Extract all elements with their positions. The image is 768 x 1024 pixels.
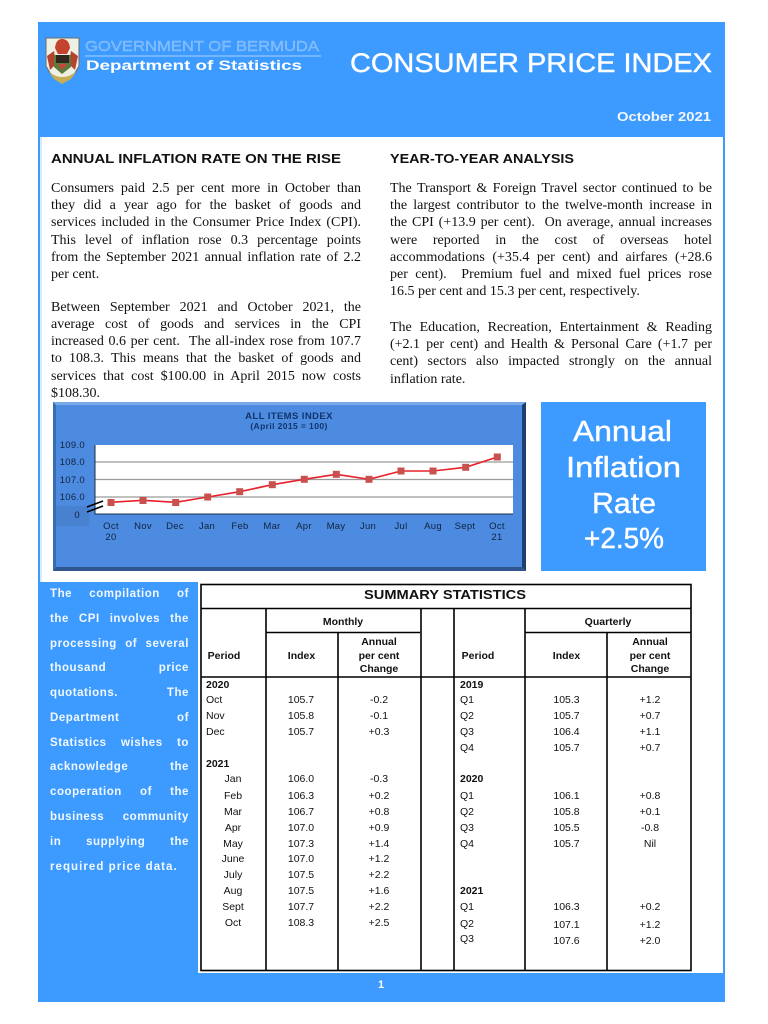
monthly data: +2.5 bbox=[369, 917, 390, 929]
monthly data: +1.2 bbox=[369, 853, 390, 865]
x axis labels: Nov bbox=[134, 521, 152, 532]
quarterly data: +1.2 bbox=[640, 919, 661, 931]
quarterly data: Q1 bbox=[460, 790, 474, 802]
quarterly data: -0.8 bbox=[641, 822, 659, 834]
heading: Government of Bermuda: GOVERNMENT OF BERMUDA bbox=[85, 39, 319, 55]
x axis labels: Jan bbox=[199, 521, 215, 532]
monthly data: Aug bbox=[224, 885, 242, 897]
callout: annual inflation rate: +2.5% bbox=[584, 523, 664, 555]
x axis labels: Dec bbox=[166, 521, 184, 532]
heading: Department of Statistics: Department of Statistics bbox=[86, 57, 302, 73]
quarterly data: 105.7 bbox=[553, 710, 580, 722]
quarterly data: 106.4 bbox=[553, 726, 580, 738]
quarterly data: +0.7 bbox=[640, 742, 661, 754]
text block: year-to-year analysis: cent) sectors also impacted strongly on the annual bbox=[390, 354, 712, 369]
quarterly data: +0.7 bbox=[640, 710, 661, 722]
callout: annual inflation rate: Rate bbox=[592, 488, 656, 520]
text block: inflation commentary: This level of inflation rose 0.3 percentage points bbox=[51, 233, 361, 248]
text block: year-to-year analysis: per cent). Premium fuel and mixed fuel prices rose bbox=[390, 267, 712, 282]
quarterly data: Q3 bbox=[460, 726, 474, 738]
text block: year-to-year analysis: were reported in the cost of overseas hotel bbox=[390, 233, 712, 248]
callout: annual inflation rate bbox=[541, 402, 706, 571]
y axis labels: 0 bbox=[74, 510, 80, 521]
column headers: Period bbox=[208, 650, 240, 662]
text block: year-to-year analysis: The Education, Recreation, Entertainment & Reading bbox=[390, 320, 712, 335]
page number: 1 bbox=[378, 979, 384, 991]
monthly data: +0.2 bbox=[369, 790, 390, 802]
text block: inflation commentary: services that cost $100.00 in April 2015 now costs bbox=[51, 369, 361, 384]
quarterly data: Q2 bbox=[460, 806, 474, 818]
quarterly data: Q4 bbox=[460, 838, 474, 850]
quarterly data: 105.8 bbox=[553, 806, 580, 818]
quarterly data bbox=[460, 679, 661, 947]
monthly data: Feb bbox=[224, 790, 242, 802]
quarterly data: +1.1 bbox=[640, 726, 661, 738]
monthly data: 107.5 bbox=[288, 885, 314, 897]
text block: sidebar acknowledgement: Statistics wishes to bbox=[50, 737, 189, 749]
quarterly data: 105.5 bbox=[553, 822, 580, 834]
column headers: Index bbox=[288, 650, 315, 662]
monthly data: +1.4 bbox=[369, 838, 390, 850]
quarterly data: Q2 bbox=[460, 918, 474, 930]
column headers bbox=[208, 616, 671, 675]
monthly data: May bbox=[223, 838, 244, 850]
x axis labels: Apr bbox=[296, 521, 312, 532]
text block: sidebar acknowledgement: business community bbox=[50, 811, 189, 823]
quarterly data: +0.1 bbox=[640, 806, 661, 818]
y axis labels: 107.0 bbox=[60, 475, 85, 486]
quarterly data: Q1 bbox=[460, 901, 474, 913]
monthly data bbox=[206, 679, 390, 929]
y axis labels: 109.0 bbox=[60, 440, 85, 451]
monthly data: Dec bbox=[206, 726, 225, 738]
white content area bbox=[40, 137, 723, 973]
monthly data: +0.8 bbox=[369, 806, 390, 818]
chart title bbox=[245, 411, 333, 431]
date: October 2021 bbox=[617, 110, 711, 124]
monthly data: +0.9 bbox=[369, 822, 390, 834]
text block: inflation commentary: services included in the Consumer Price Index (CPI). bbox=[51, 215, 361, 230]
text block: sidebar acknowledgement: processing of several bbox=[50, 638, 189, 650]
monthly data: -0.1 bbox=[370, 710, 388, 722]
text block: sidebar acknowledgement: thousand price bbox=[50, 662, 189, 674]
monthly data: Jan bbox=[225, 773, 242, 785]
column headers: Index bbox=[553, 650, 580, 662]
monthly data: 106.7 bbox=[288, 806, 314, 818]
monthly data: 106.3 bbox=[288, 790, 314, 802]
column headers: Quarterly bbox=[585, 616, 632, 628]
chart title: ALL ITEMS INDEX bbox=[245, 411, 333, 422]
x axis labels: 21 bbox=[491, 532, 503, 543]
table title: SUMMARY STATISTICS bbox=[364, 588, 526, 602]
quarterly data: Q2 bbox=[460, 710, 474, 722]
text block: year-to-year analysis: inflation rate. bbox=[390, 372, 465, 387]
monthly data: Nov bbox=[206, 710, 225, 722]
text block: year-to-year analysis: The Transport & Foreign Travel sector continued to be bbox=[390, 181, 712, 196]
monthly data: 105.8 bbox=[288, 710, 314, 722]
monthly data: Apr bbox=[225, 822, 242, 834]
data points bbox=[108, 454, 501, 506]
quarterly data: 105.7 bbox=[553, 838, 580, 850]
y axis labels bbox=[60, 440, 85, 521]
text block: year-to-year analysis: 16.5 per cent and 15.3 per cent, respectively. bbox=[390, 284, 640, 299]
monthly data: -0.3 bbox=[370, 773, 388, 785]
text block: inflation commentary: Between September 2021 and October 2021, the bbox=[51, 300, 361, 315]
quarterly data: Q4 bbox=[460, 742, 474, 754]
text block: sidebar acknowledgement: Department of bbox=[50, 712, 189, 724]
text block: inflation commentary: from the September 2021 annual inflation rate of 2.2 bbox=[51, 250, 361, 265]
monthly data: June bbox=[222, 853, 245, 865]
heading: annual inflation rate: ANNUAL INFLATION RATE ON THE RISE bbox=[51, 151, 341, 166]
monthly data: 107.3 bbox=[288, 838, 314, 850]
quarterly data: Q1 bbox=[460, 694, 474, 706]
column headers: Annual bbox=[361, 636, 397, 648]
column headers: Change bbox=[360, 663, 398, 675]
text block: year-to-year analysis: accommodations (+35.4 per cent) and airfares (+28.6 bbox=[390, 250, 712, 265]
y axis labels: 106.0 bbox=[60, 492, 85, 503]
quarterly data: 106.1 bbox=[553, 790, 580, 802]
quarterly data: 2020 bbox=[460, 773, 484, 785]
quarterly data: 2021 bbox=[460, 885, 484, 897]
monthly data: +2.2 bbox=[369, 869, 390, 881]
monthly data: 105.7 bbox=[288, 726, 314, 738]
quarterly data: 106.3 bbox=[553, 901, 580, 913]
x axis labels: Sept bbox=[455, 521, 475, 532]
quarterly data: 107.6 bbox=[553, 935, 580, 947]
quarterly data: 105.7 bbox=[553, 742, 580, 754]
quarterly data: 2019 bbox=[460, 679, 484, 691]
text block: inflation commentary: average cost of goods and services in the CPI bbox=[51, 317, 361, 332]
monthly data: Sept bbox=[222, 901, 244, 913]
line chart: all items index bbox=[53, 402, 526, 571]
monthly data: 107.0 bbox=[288, 853, 314, 865]
monthly data: +2.2 bbox=[369, 901, 390, 913]
table: summary statistics bbox=[200, 584, 692, 972]
quarterly data: +0.8 bbox=[640, 790, 661, 802]
text block: inflation commentary: Consumers paid 2.5 per cent more in October than bbox=[51, 181, 361, 196]
text block: sidebar acknowledgement: the CPI involves the bbox=[50, 613, 189, 625]
text block: sidebar acknowledgement: in supplying the bbox=[50, 836, 189, 848]
monthly data: Oct bbox=[225, 917, 241, 929]
quarterly data: Q3 bbox=[460, 933, 474, 945]
axis break mark bbox=[87, 501, 103, 512]
monthly data: 107.5 bbox=[288, 869, 314, 881]
column headers: Period bbox=[462, 650, 494, 662]
icon: Bermuda coat of arms bbox=[46, 38, 79, 84]
text block: sidebar acknowledgement bbox=[50, 588, 189, 873]
text block: year-to-year analysis: the CPI (+13.9 per cent). On average, annual increases bbox=[390, 215, 712, 230]
text block: inflation commentary: increased 0.6 per cent. The all-index rose from 107.7 bbox=[51, 334, 361, 349]
text block: sidebar acknowledgement: The compilation of bbox=[50, 588, 189, 600]
monthly data: 107.0 bbox=[288, 822, 314, 834]
quarterly data: +0.2 bbox=[640, 901, 661, 913]
monthly data: -0.2 bbox=[370, 694, 388, 706]
heading: year-to-year analysis: YEAR-TO-YEAR ANALYSIS bbox=[390, 151, 574, 166]
chart title: (April 2015 = 100) bbox=[250, 421, 328, 431]
x axis labels: Oct bbox=[489, 521, 505, 532]
text block: inflation commentary bbox=[51, 181, 361, 401]
column headers: Change bbox=[631, 663, 669, 675]
callout: annual inflation rate: Inflation bbox=[566, 452, 681, 484]
monthly data: Mar bbox=[224, 806, 243, 818]
monthly data: 105.7 bbox=[288, 694, 314, 706]
quarterly data: 105.3 bbox=[553, 694, 580, 706]
text block: year-to-year analysis bbox=[390, 181, 712, 387]
monthly data: 108.3 bbox=[288, 917, 314, 929]
x axis labels: Mar bbox=[263, 521, 281, 532]
text block: year-to-year analysis: (+2.1 per cent) and Health & Personal Care (+1.7 per bbox=[390, 337, 712, 352]
x axis labels: Aug bbox=[424, 521, 442, 532]
text block: inflation commentary: per cent. bbox=[51, 267, 99, 282]
text block: sidebar acknowledgement: quotations. The bbox=[50, 687, 189, 699]
x axis labels: Oct bbox=[103, 521, 119, 532]
monthly data: 106.0 bbox=[288, 773, 314, 785]
text block: sidebar acknowledgement: required price data. bbox=[50, 861, 178, 873]
callout: annual inflation rate: Annual bbox=[573, 416, 672, 448]
monthly data: 107.7 bbox=[288, 901, 314, 913]
monthly data: July bbox=[224, 869, 243, 881]
x axis labels: May bbox=[327, 521, 345, 532]
monthly data: +1.6 bbox=[369, 885, 390, 897]
monthly data: Oct bbox=[206, 694, 222, 706]
monthly data: 2020 bbox=[206, 679, 230, 691]
column headers: Monthly bbox=[323, 616, 363, 628]
column headers: per cent bbox=[630, 650, 671, 662]
column headers: per cent bbox=[359, 650, 400, 662]
monthly data: +0.3 bbox=[369, 726, 390, 738]
monthly data: 2021 bbox=[206, 758, 230, 770]
text block: year-to-year analysis: the largest contributor to the twelve-month increase in bbox=[390, 198, 712, 213]
x axis labels: Feb bbox=[231, 521, 249, 532]
quarterly data: +2.0 bbox=[640, 935, 661, 947]
quarterly data: 107.1 bbox=[553, 919, 580, 931]
text block: sidebar acknowledgement: cooperation of the bbox=[50, 786, 189, 798]
x axis labels: Jul bbox=[394, 521, 408, 532]
title: CONSUMER PRICE INDEX bbox=[350, 48, 712, 78]
column headers: Annual bbox=[632, 636, 668, 648]
text block: sidebar acknowledgement: acknowledge the bbox=[50, 761, 189, 773]
quarterly data: Q3 bbox=[460, 822, 474, 834]
panel: sidebar background bbox=[38, 582, 198, 974]
y axis labels: 108.0 bbox=[60, 457, 85, 468]
quarterly data: +1.2 bbox=[640, 694, 661, 706]
x axis labels: Jun bbox=[360, 521, 376, 532]
x axis labels: 20 bbox=[105, 532, 117, 543]
text block: inflation commentary: they did a year ago for the basket of goods and bbox=[51, 198, 361, 213]
quarterly data: Nil bbox=[644, 838, 656, 850]
text block: inflation commentary: to 108.3. This means that the basket of goods and bbox=[51, 351, 361, 366]
text block: inflation commentary: $108.30. bbox=[51, 386, 100, 401]
x axis labels bbox=[103, 521, 505, 543]
data line bbox=[111, 457, 497, 502]
